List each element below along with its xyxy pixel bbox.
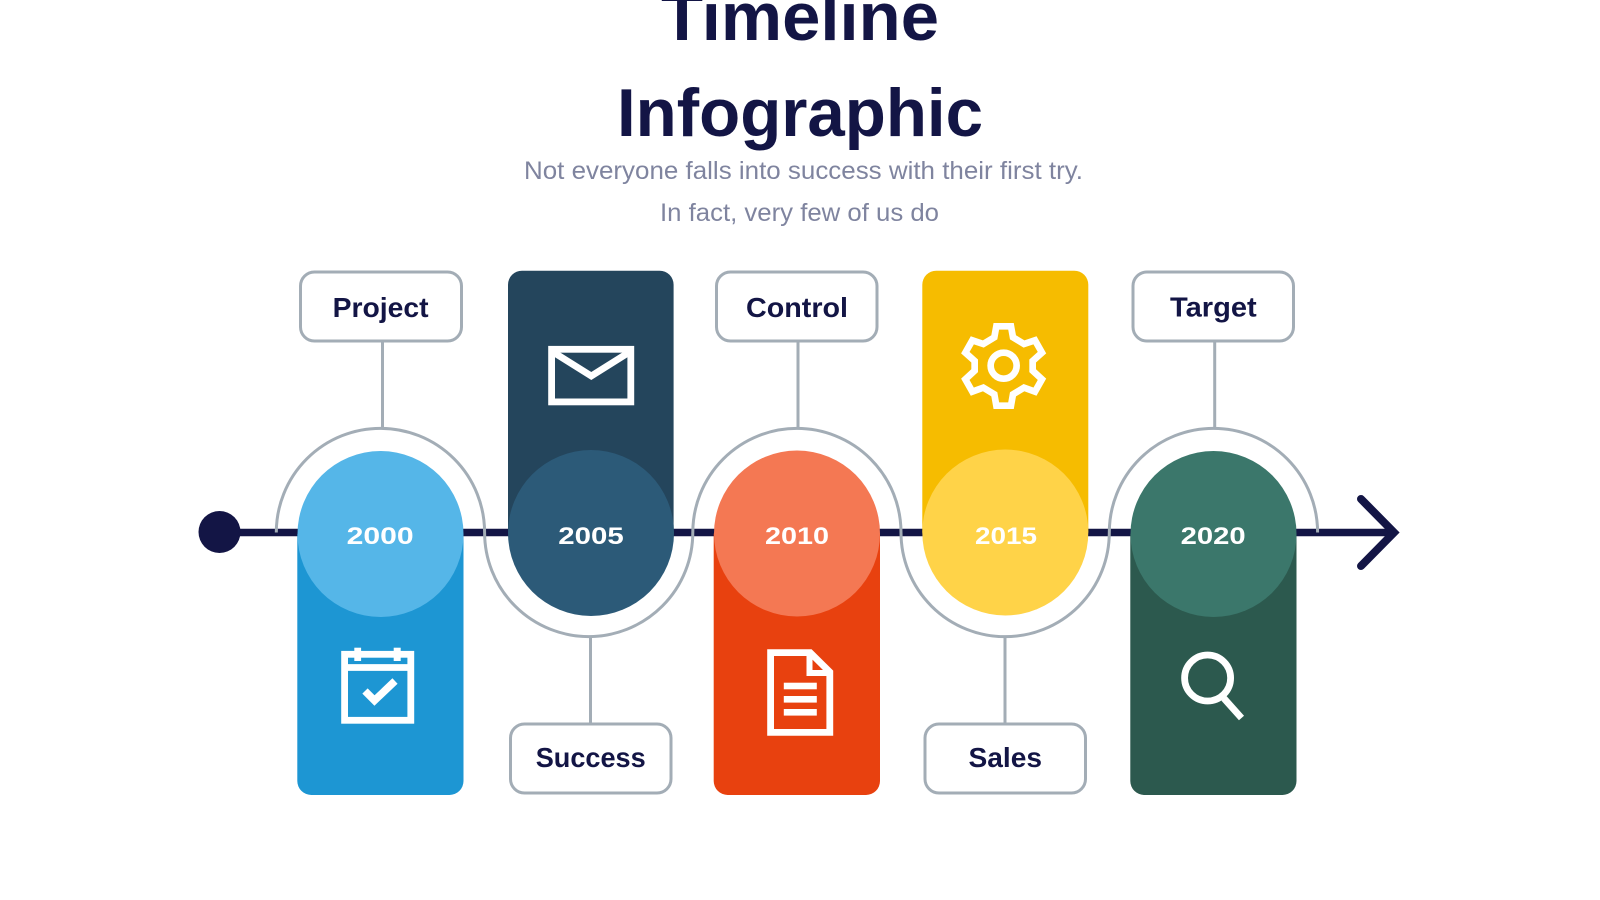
wavy connector arcs	[276, 428, 1318, 637]
icon: gear	[965, 326, 1042, 406]
milestone 2010: Control	[714, 272, 880, 795]
card 2000	[297, 534, 464, 795]
circle 2000: 2000	[347, 523, 414, 550]
title: Infographic	[617, 75, 983, 151]
circle 2020: 2020	[1181, 523, 1246, 550]
circle 2010	[714, 450, 880, 616]
subtitle: In fact, very few of us do	[660, 199, 939, 227]
circle 2005	[508, 450, 674, 616]
title	[617, 0, 983, 151]
subtitle: Not everyone falls into success with their first try.	[524, 157, 1083, 185]
circle 2015	[922, 450, 1088, 616]
connector and label box: Sales	[925, 636, 1086, 793]
circle 2000	[298, 451, 464, 617]
circle 2020	[1130, 451, 1296, 617]
timeline axis with start dot and arrow	[198, 499, 1394, 566]
connector and label box: Target: Target	[1170, 292, 1257, 322]
icon: document	[771, 652, 830, 732]
card 2005	[508, 271, 674, 533]
icon: envelope	[552, 349, 631, 402]
connector and label box: Project	[300, 272, 462, 429]
card 2010	[714, 534, 880, 795]
connector and label box: Success	[510, 636, 671, 793]
connector and label box: Target	[1133, 272, 1294, 429]
milestone 2020: Target	[1130, 272, 1296, 795]
card 2015	[922, 271, 1088, 532]
milestone 2005: Success	[508, 271, 674, 793]
circle 2010: 2010	[765, 523, 829, 550]
milestone 2015: Sales	[922, 271, 1088, 793]
connector and label box: Success: Success	[536, 742, 646, 773]
connector and label box: Control	[716, 272, 877, 429]
connector and label box: Control: Control	[746, 292, 848, 323]
icon: magnifier	[1185, 655, 1242, 718]
connector and label box: Sales: Sales	[968, 742, 1042, 773]
circle 2005: 2005	[558, 523, 624, 550]
connector and label box: Project: Project	[333, 292, 429, 323]
milestone 2000: Project	[297, 272, 464, 795]
card 2020	[1130, 534, 1296, 795]
circle 2015: 2015	[975, 523, 1037, 550]
subtitle	[524, 157, 1083, 227]
icon: calendar	[344, 648, 411, 720]
